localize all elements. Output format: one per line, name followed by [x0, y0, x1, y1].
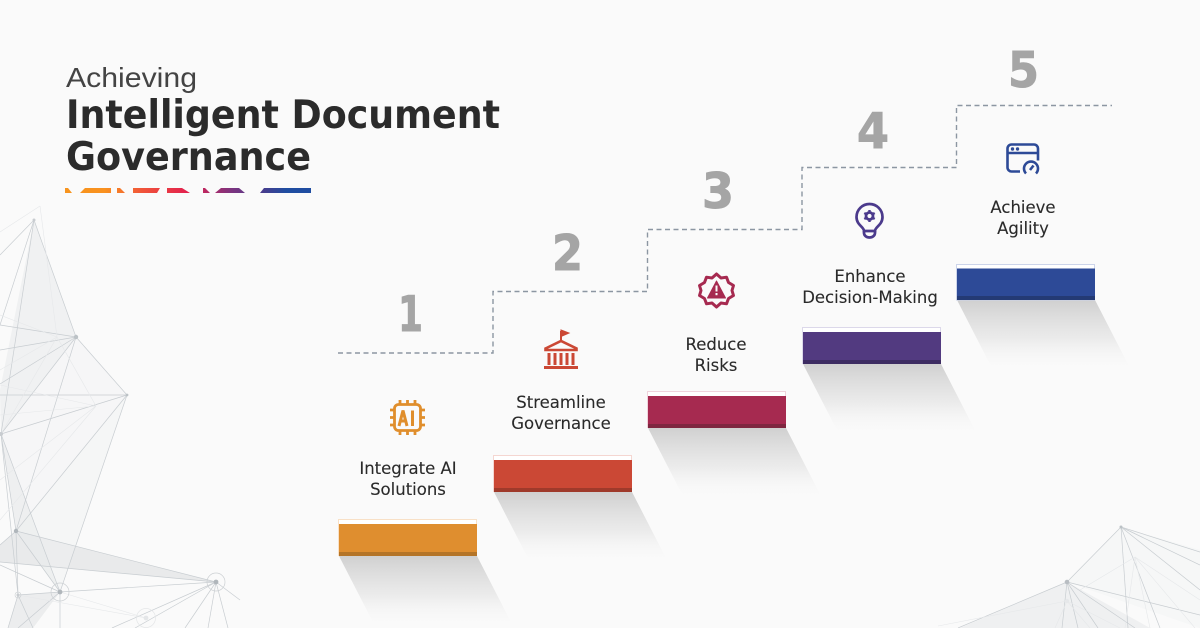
title line: Governance: Governance — [66, 135, 311, 180]
step label: Streamline — [516, 393, 606, 412]
step 4 — [802, 103, 978, 436]
step bar — [338, 520, 477, 556]
step label: Enhance — [834, 267, 906, 286]
icon: AI chip — [390, 400, 425, 435]
step label: Agility — [997, 219, 1049, 238]
step label: Solutions — [370, 480, 446, 499]
step bar shadow — [339, 556, 514, 628]
step label — [511, 393, 611, 433]
step label — [359, 459, 457, 499]
step bar shadow — [648, 428, 823, 500]
step bar shadow — [803, 364, 978, 436]
step label — [990, 198, 1056, 238]
title line: Intelligent Document: Intelligent Document — [66, 93, 500, 138]
step label: Achieve — [990, 198, 1056, 217]
step number 3: 3 — [702, 163, 734, 220]
icon: browser window with gauge — [1008, 144, 1038, 174]
step label: Reduce — [685, 335, 747, 354]
title — [66, 62, 500, 180]
title colour underline — [65, 188, 311, 193]
step label: Integrate AI — [359, 459, 457, 478]
title line: Achieving: Achieving — [66, 62, 197, 93]
step label: Decision-Making — [802, 288, 938, 307]
icon: gear with warning triangle — [700, 274, 734, 307]
step 1 — [338, 286, 514, 628]
step label — [802, 267, 938, 307]
step label: Governance — [511, 414, 611, 433]
step number 1: 1 — [398, 286, 423, 343]
step bar — [648, 392, 786, 428]
icon: light bulb with gear — [856, 204, 882, 238]
step label — [685, 335, 747, 375]
step number 5: 5 — [1008, 42, 1039, 99]
step number 2: 2 — [552, 225, 583, 282]
left network decoration — [0, 206, 240, 628]
step 2 — [494, 225, 669, 564]
dashed staircase line — [338, 106, 1112, 353]
step bar — [802, 328, 941, 364]
step bar — [956, 264, 1095, 300]
step bar shadow — [494, 492, 669, 564]
step number 4: 4 — [857, 103, 889, 160]
step label: Risks — [695, 356, 737, 375]
step bar shadow — [957, 300, 1132, 372]
step bar — [494, 456, 632, 492]
right network decoration — [938, 526, 1200, 628]
step 3 — [648, 163, 823, 500]
step 5 — [956, 42, 1132, 372]
icon: government building — [544, 330, 578, 368]
